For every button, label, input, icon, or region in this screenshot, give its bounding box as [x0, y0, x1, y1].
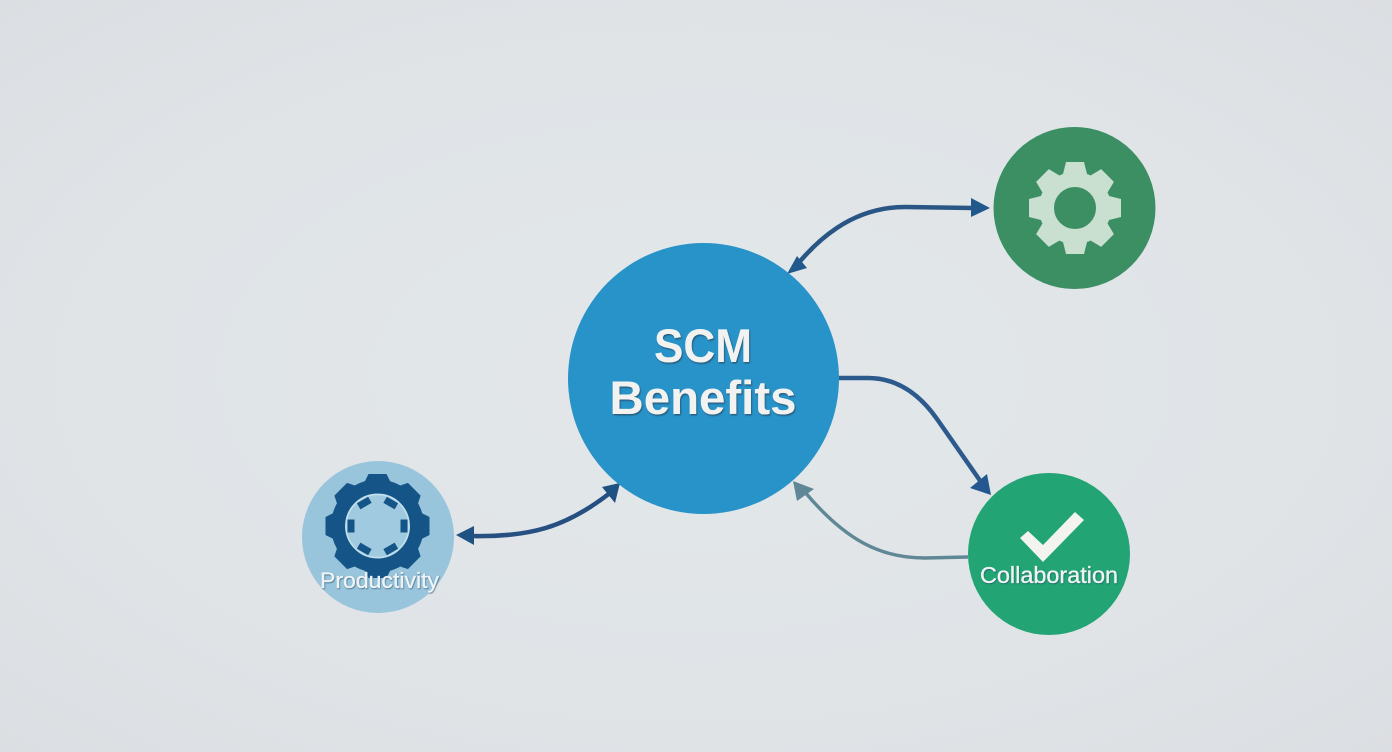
node: collaboration — [968, 473, 1130, 635]
arrow: SCM Benefits to collaboration — [839, 378, 991, 495]
icon: pale gear — [1029, 162, 1121, 254]
node: productivity — [302, 461, 454, 613]
heading: Benefits: Benefits — [610, 371, 796, 424]
label: Collaboration: Collaboration — [980, 562, 1118, 588]
label: Productivity: Productivity — [320, 568, 439, 593]
arrow: SCM Benefits to gear node (two-way) — [787, 198, 990, 274]
icon: check mark — [1020, 512, 1084, 562]
node: green gear — [994, 127, 1156, 289]
central node: SCM Benefits — [568, 243, 839, 514]
arrow: collaboration to SCM Benefits — [793, 481, 968, 558]
heading: SCM: SCM — [654, 319, 752, 372]
arrow: productivity to SCM Benefits (two-way) — [456, 483, 620, 545]
icon: dark blue gear — [326, 474, 430, 578]
